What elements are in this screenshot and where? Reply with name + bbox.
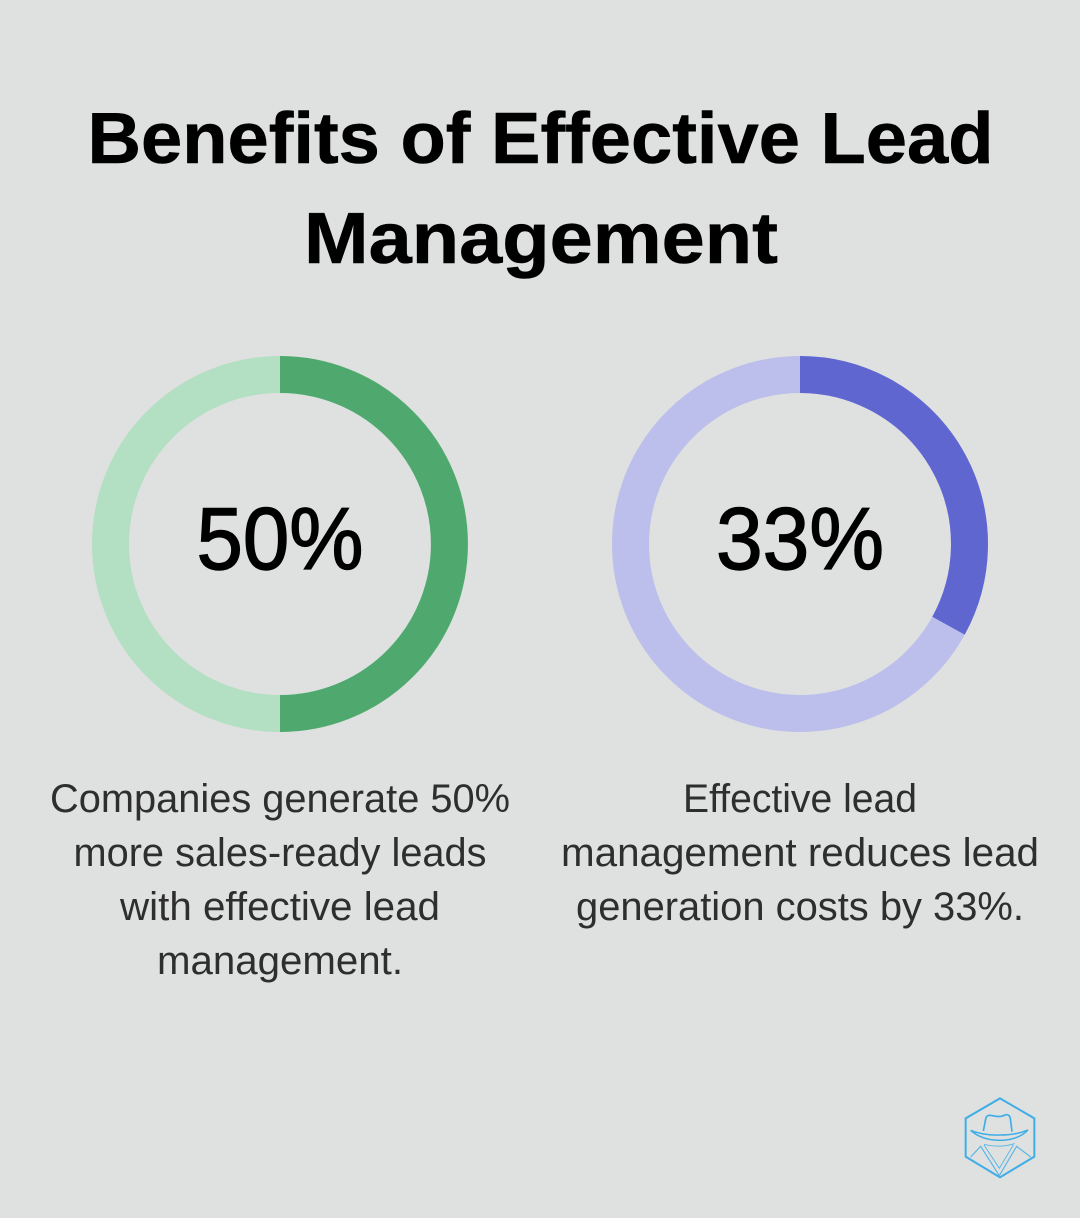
panel: 33% statistic	[561, 374, 1039, 929]
description: 33% lower costs: generation costs by 33%.	[576, 885, 1024, 929]
description: 50% more leads: more sales-ready leads	[74, 831, 486, 875]
description: 50% more leads: management.	[157, 939, 403, 983]
description: 50% more leads: with effective lead	[119, 885, 440, 929]
description: 50% more leads: Companies generate 50%	[50, 777, 510, 821]
title	[88, 99, 994, 279]
donut chart: 50%	[110, 374, 450, 714]
description: 50% more leads	[50, 777, 510, 983]
description: 33% lower costs	[561, 777, 1039, 929]
title: Management	[304, 199, 778, 279]
donut chart: 33%	[630, 374, 970, 714]
icon: hexagon spy logo	[966, 1098, 1034, 1177]
title: Benefits of Effective Lead	[88, 99, 994, 179]
value: 50%: 50%	[196, 489, 364, 588]
panel: 50% statistic	[50, 374, 510, 983]
description: 33% lower costs: Effective lead	[683, 777, 917, 821]
value: 33%: 33%	[716, 489, 884, 588]
description: 33% lower costs: management reduces lead	[561, 831, 1039, 875]
